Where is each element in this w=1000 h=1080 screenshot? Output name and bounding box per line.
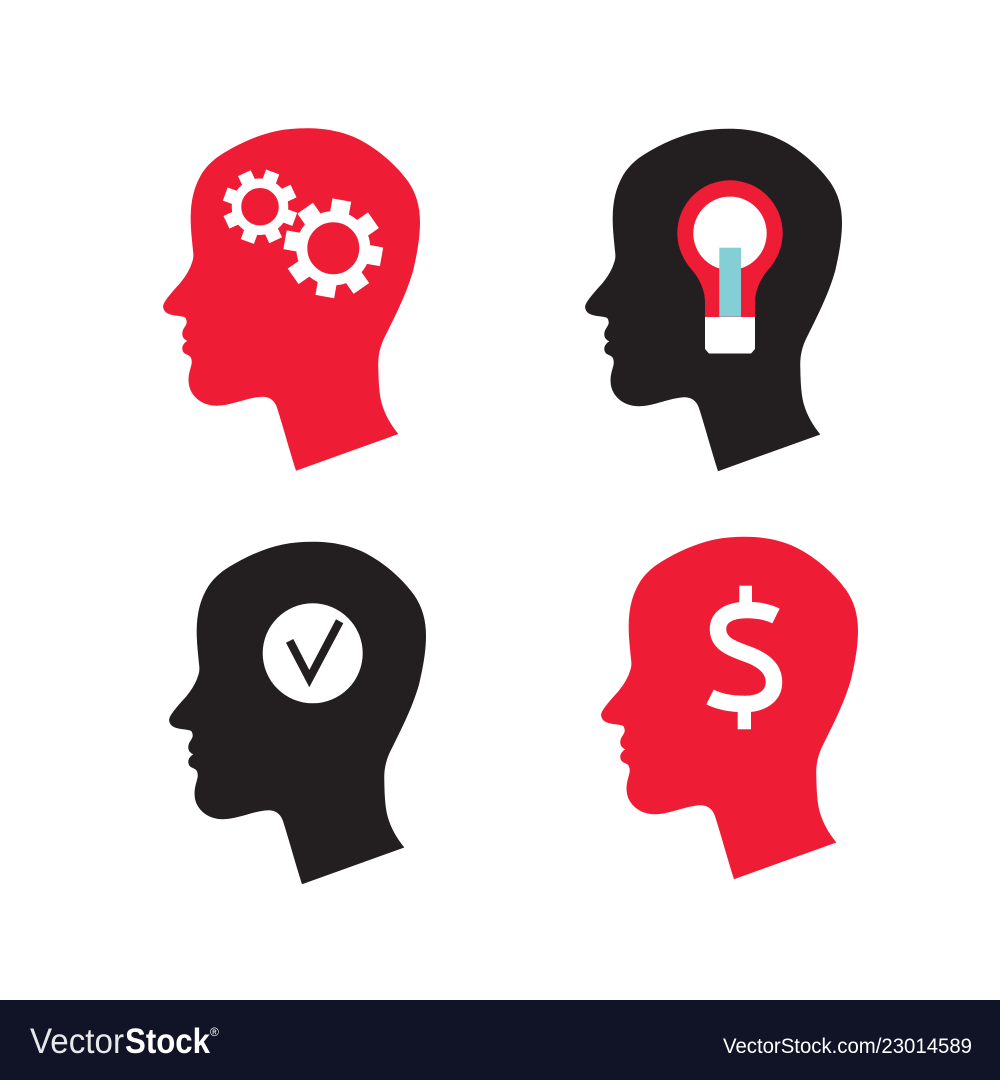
icon: red head with gears [163,128,420,471]
light bulb [677,180,783,354]
footer logo: Vector [30,1022,124,1061]
small gear [223,170,297,244]
footer logo: Stock [125,1022,210,1061]
large gear [283,198,383,298]
check badge [263,603,363,703]
footer logo: ® [210,1025,219,1039]
icon: black head with check mark [169,542,426,884]
red head silhouette [601,537,858,879]
icon: red head with dollar sign [601,537,858,879]
icon: black head with light bulb [585,129,842,471]
red head silhouette [163,128,420,471]
black head silhouette [169,542,426,884]
footer image id: VectorStock.com/23014589 [723,1035,972,1058]
black head silhouette [585,129,842,471]
footer bar [0,1000,1000,1080]
dollar sign [710,586,776,729]
